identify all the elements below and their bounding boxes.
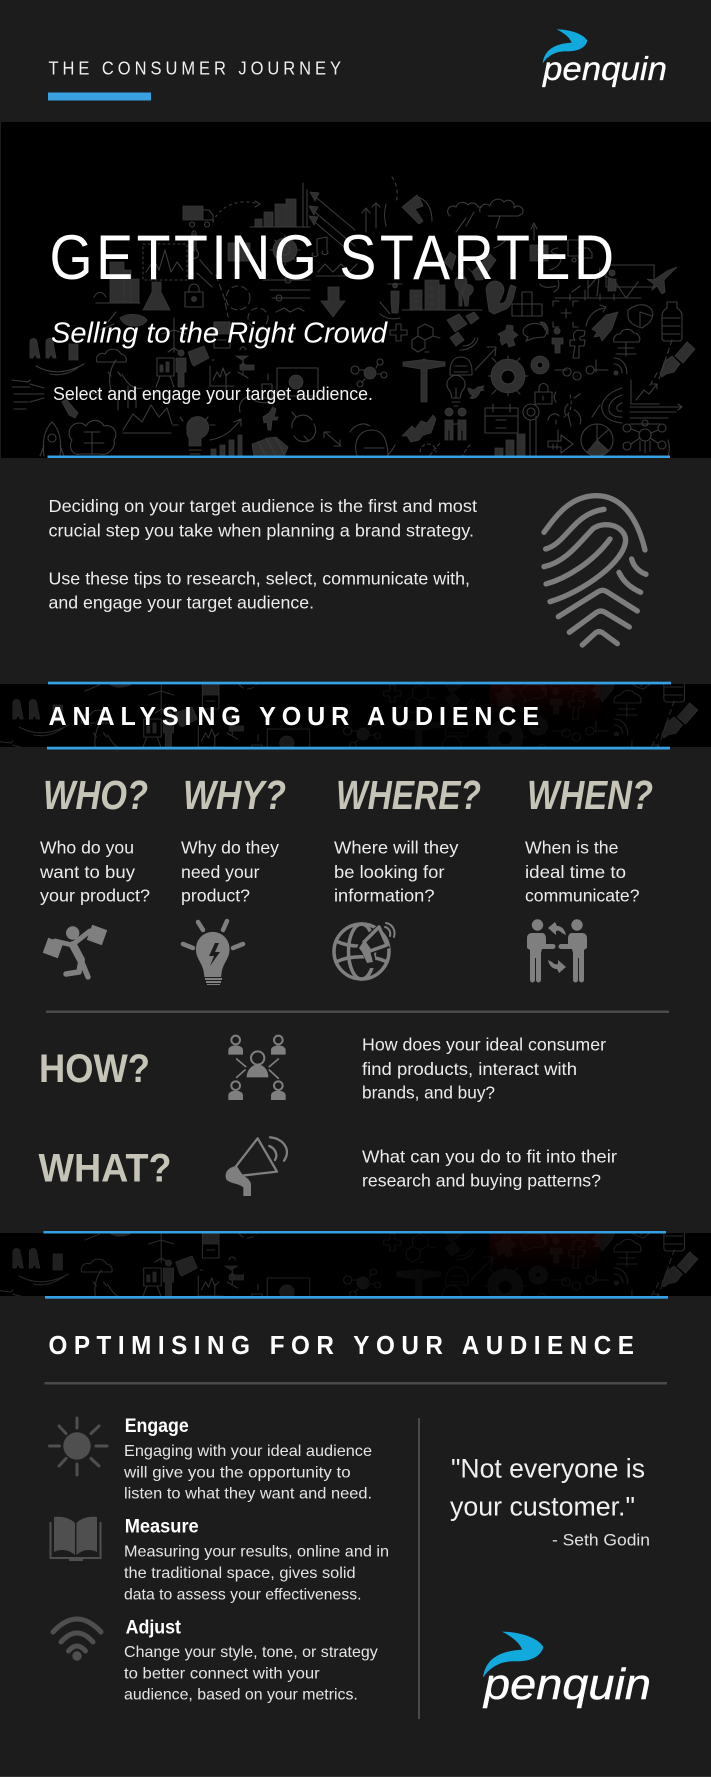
tip: adjust: Adjust	[126, 1616, 181, 1638]
tip: engage	[50, 1415, 372, 1503]
icon: megaphone	[226, 1137, 287, 1196]
icon: globe with megaphone	[334, 923, 395, 979]
header accent bar	[48, 92, 151, 100]
section heading: optimising: OPTIMISING FOR YOUR AUDIENCE	[48, 1330, 640, 1360]
hero underline	[48, 456, 670, 458]
doodle background	[12, 177, 695, 458]
header title: THE CONSUMER JOURNEY	[48, 58, 345, 79]
row: how: HOW?	[39, 1047, 150, 1091]
how description: brands, and buy?	[362, 1083, 495, 1103]
tip: measure: the traditional space, gives solid	[124, 1565, 356, 1582]
section heading: ANALYSING YOUR AUDIENCE	[48, 703, 545, 731]
icon: fingerprint	[544, 496, 646, 645]
quote	[450, 1454, 650, 1550]
row: how	[39, 1035, 606, 1103]
column: when	[525, 772, 653, 982]
intro text: Deciding on your target audience is the first and most	[48, 496, 477, 516]
what description: research and buying patterns?	[362, 1171, 601, 1191]
column: when: ideal time to	[525, 862, 626, 882]
hero title: GETTING STARTED	[50, 223, 618, 293]
banner: decorative strip	[0, 1231, 711, 1299]
column: when: When is the	[525, 838, 618, 858]
column: who: want to buy	[39, 862, 135, 882]
quote attribution: - Seth Godin	[552, 1531, 650, 1550]
what description: What can you do to fit into their	[362, 1147, 617, 1167]
column: where	[334, 772, 481, 979]
intro text: Use these tips to research, select, communicate with,	[48, 568, 470, 588]
quote: your customer."	[450, 1492, 635, 1522]
what description	[362, 1147, 617, 1191]
icon: wifi	[53, 1619, 101, 1661]
row: what: WHAT?	[38, 1147, 172, 1191]
penquin logo: top: penquin	[542, 50, 667, 87]
column: who: WHO?	[43, 772, 148, 818]
tip: measure: data to assess your effectiveness.	[124, 1586, 362, 1603]
quote: "Not everyone is	[451, 1454, 645, 1484]
tip: adjust: Change your style, tone, or strategy	[124, 1644, 378, 1661]
column: where: be looking for	[334, 862, 445, 882]
tip: adjust: to better connect with your	[124, 1665, 320, 1682]
column: why: product?	[181, 886, 250, 906]
column: why: need your	[181, 862, 260, 882]
icon: shopper with bags	[43, 925, 107, 977]
column: who: your product?	[40, 886, 150, 906]
column: why: WHY?	[183, 772, 286, 818]
tip: adjust: audience, based on your metrics.	[124, 1687, 358, 1704]
icon: audience network	[228, 1036, 286, 1100]
hero tagline: Select and engage your target audience.	[53, 384, 373, 404]
penquin logo: bottom: penquin	[482, 1660, 651, 1709]
how description	[362, 1035, 606, 1103]
intro text: and engage your target audience.	[48, 593, 314, 613]
penquin logo: top	[542, 29, 667, 87]
vertical divider	[418, 1418, 420, 1719]
tip: measure: Measure	[125, 1516, 199, 1538]
column: when: communicate?	[525, 886, 640, 906]
column: why: Why do they	[181, 838, 279, 858]
intro text	[48, 496, 477, 613]
tip: engage: will give you the opportunity to	[123, 1464, 351, 1481]
tip: engage: Engaging with your ideal audience	[124, 1443, 372, 1460]
column: where: information?	[334, 886, 435, 906]
divider	[46, 1010, 669, 1013]
divider	[44, 1382, 667, 1384]
banner: analysing your audience	[0, 682, 711, 750]
column: where: Where will they	[334, 838, 459, 858]
column: when: WHEN?	[527, 772, 653, 818]
tip: measure	[50, 1516, 389, 1603]
hero subtitle: Selling to the Right Crowd	[51, 318, 388, 350]
icon: sun	[50, 1418, 107, 1475]
icon: light bulb	[183, 921, 243, 985]
column: why	[181, 772, 286, 985]
intro text: crucial step you take when planning a brand strategy.	[48, 520, 474, 540]
icon: open book	[50, 1517, 100, 1561]
tip: adjust	[53, 1616, 378, 1704]
column: who: Who do you	[40, 838, 134, 858]
icon: people exchanging	[527, 919, 587, 982]
penquin logo: bottom	[482, 1632, 651, 1709]
column: who	[39, 772, 150, 977]
column: where: WHERE?	[336, 772, 481, 818]
row: what	[38, 1137, 617, 1196]
how description: find products, interact with	[362, 1059, 577, 1079]
header	[48, 29, 667, 101]
how description: How does your ideal consumer	[362, 1035, 606, 1055]
tip: measure: Measuring your results, online and in	[124, 1544, 389, 1561]
tip: engage: listen to what they want and need.	[124, 1486, 372, 1503]
tip: engage: Engage	[125, 1415, 189, 1437]
hero panel	[1, 122, 711, 458]
